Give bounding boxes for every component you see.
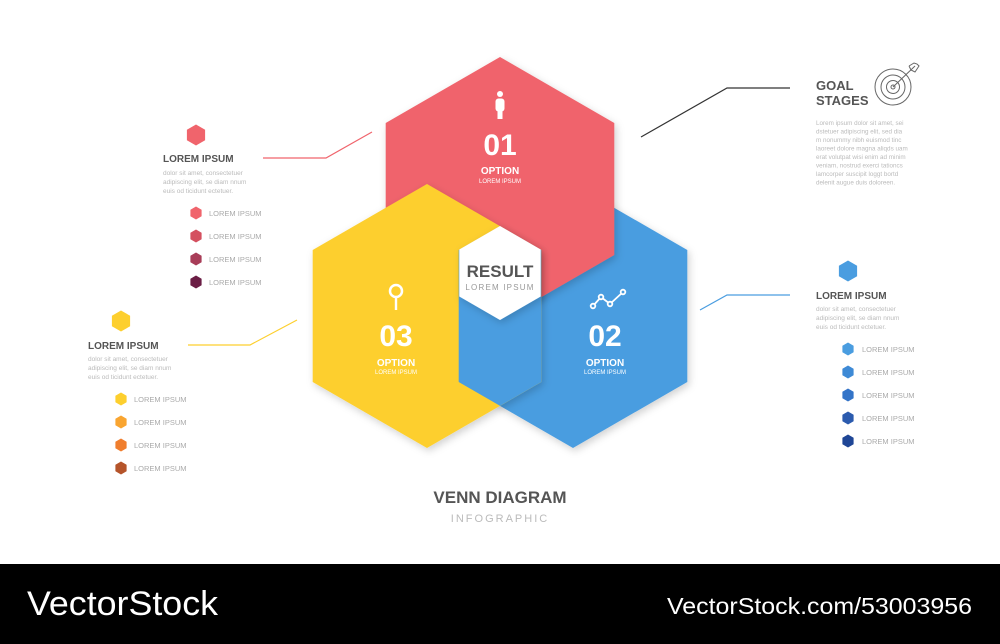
panel: yellow lorem ipsum: euis od ticidunt ectetuer. xyxy=(88,374,158,381)
panel: yellow lorem ipsum: adipiscing elit, se diam nnum xyxy=(88,365,171,372)
panel: goal stages: m nonummy nibh euismod tinc xyxy=(816,137,901,144)
panel: blue lorem ipsum: LOREM IPSUM xyxy=(862,345,915,354)
panel: goal stages: veniam, nostrud exerci tationcs xyxy=(816,162,903,170)
panel: blue lorem ipsum: dolor sit amet, consectetuer xyxy=(816,306,897,313)
panel: yellow lorem ipsum: LOREM IPSUM xyxy=(134,441,187,450)
icon: target xyxy=(875,63,919,105)
panel: red lorem ipsum: dolor sit amet, consectetuer xyxy=(163,170,244,177)
option 03 content: OPTION xyxy=(377,358,415,369)
option 03 content: 03 xyxy=(379,320,413,353)
panel: blue lorem ipsum: LOREM IPSUM xyxy=(862,391,915,400)
connector lines xyxy=(188,88,790,345)
result hexagon xyxy=(459,226,541,320)
venn diagram xyxy=(313,57,687,448)
panel: goal stages: laoreet dolore magna aliqds uam xyxy=(816,146,908,152)
option 01 content: LOREM IPSUM xyxy=(479,179,521,185)
panel: yellow lorem ipsum: LOREM IPSUM xyxy=(134,395,187,404)
panel: red lorem ipsum: LOREM IPSUM xyxy=(163,154,234,165)
panel: red lorem ipsum: LOREM IPSUM xyxy=(209,209,262,218)
panel: red lorem ipsum: LOREM IPSUM xyxy=(209,232,262,241)
title xyxy=(433,488,567,525)
hexagon: option 03 yellow xyxy=(313,184,541,448)
panel: goal stages: dstetuer adipiscing elit, sed dia xyxy=(816,128,903,136)
option 01 content xyxy=(479,91,521,185)
footer bar: VectorStock xyxy=(27,585,219,623)
icon: magnifier xyxy=(390,285,402,310)
icon: line chart xyxy=(591,290,625,308)
panel: goal stages: Lorem ipsum dolor sit amet, sei xyxy=(816,120,904,127)
option 03 content: LOREM IPSUM xyxy=(375,370,417,376)
panel: goal stages: erat volutpat wisi enim ad minim xyxy=(816,154,906,161)
panel: blue lorem ipsum: LOREM IPSUM xyxy=(862,368,915,377)
hexagon: option 01 red xyxy=(386,57,614,321)
title: VENN DIAGRAM xyxy=(433,488,567,507)
panel: red lorem ipsum xyxy=(163,124,262,288)
result hexagon: LOREM IPSUM xyxy=(465,283,535,292)
panel: blue lorem ipsum: adipiscing elit, se diam nnum xyxy=(816,315,899,322)
panel: goal stages: GOAL xyxy=(816,78,854,93)
option 01 content: OPTION xyxy=(481,166,519,177)
panel: blue lorem ipsum: euis od ticidunt ectetuer. xyxy=(816,324,886,331)
panel: red lorem ipsum: adipiscing elit, se diam nnum xyxy=(163,179,246,186)
panel: red lorem ipsum: euis od ticidunt ectetuer. xyxy=(163,188,233,195)
panel: yellow lorem ipsum: dolor sit amet, consectetuer xyxy=(88,356,169,363)
panel: blue lorem ipsum: LOREM IPSUM xyxy=(862,414,915,423)
footer bar: VectorStock.com/53003956 xyxy=(667,593,972,619)
option 03 content xyxy=(375,285,417,376)
panel: red lorem ipsum: LOREM IPSUM xyxy=(209,255,262,264)
panel: yellow lorem ipsum xyxy=(88,310,187,474)
icon: person xyxy=(496,91,504,119)
option 02 content xyxy=(584,290,626,376)
title: INFOGRAPHIC xyxy=(451,513,549,525)
panel: red lorem ipsum: LOREM IPSUM xyxy=(209,278,262,287)
panel: blue lorem ipsum: LOREM IPSUM xyxy=(862,437,915,446)
option 02 content: LOREM IPSUM xyxy=(584,370,626,376)
panel: yellow lorem ipsum: LOREM IPSUM xyxy=(88,341,159,352)
panel: goal stages xyxy=(816,63,919,186)
panel: goal stages: STAGES xyxy=(816,93,869,108)
option 02 content: OPTION xyxy=(586,358,624,369)
hexagon: option 02 blue xyxy=(459,184,687,448)
option 01 content: 01 xyxy=(483,129,517,162)
panel: goal stages: lamcorper suscipit loggt bortd xyxy=(816,171,899,178)
footer bar xyxy=(0,564,1000,644)
panel: blue lorem ipsum: LOREM IPSUM xyxy=(816,291,887,302)
panel: yellow lorem ipsum: LOREM IPSUM xyxy=(134,418,187,427)
option 02 content: 02 xyxy=(588,320,622,353)
panel: yellow lorem ipsum: LOREM IPSUM xyxy=(134,464,187,473)
panel: goal stages: delenit augue duis doloreen. xyxy=(816,180,895,186)
panel: blue lorem ipsum xyxy=(816,260,915,448)
blue overlap over yellow xyxy=(458,226,542,406)
result hexagon: RESULT xyxy=(467,262,534,281)
